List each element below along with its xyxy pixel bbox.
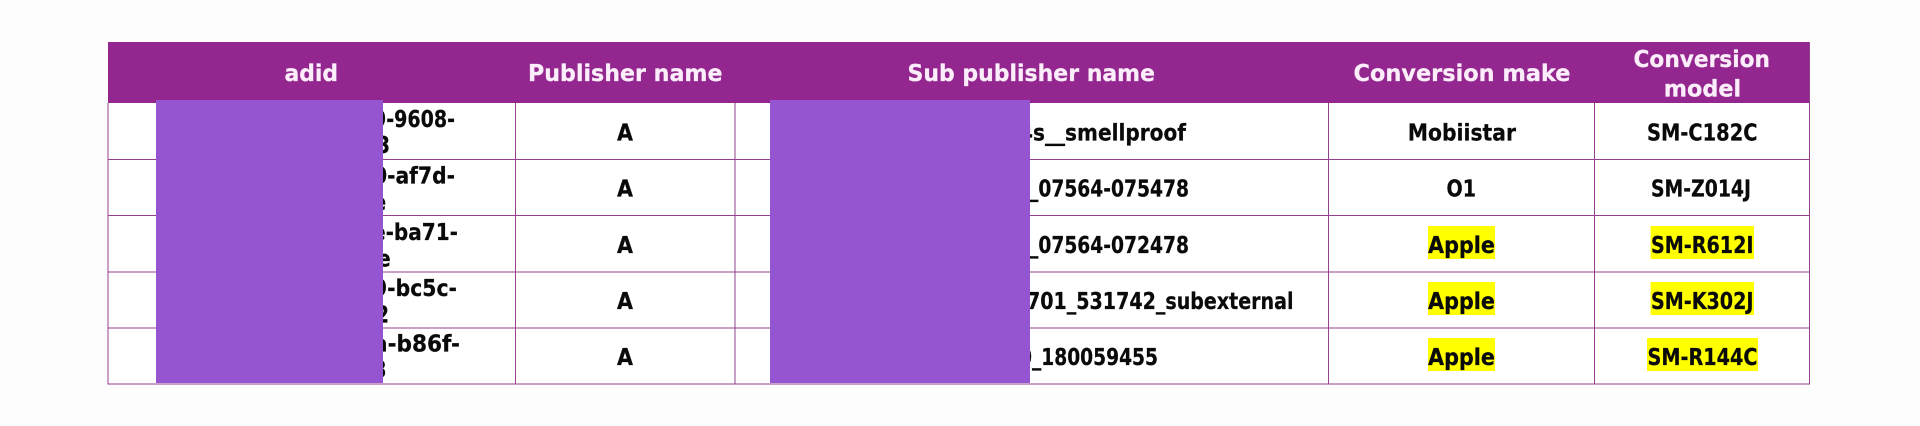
column: adid values: 0-af7d-: [373, 164, 455, 190]
column: Sub publisher name values: 4s__smellproof: [1019, 121, 1187, 147]
column: Conversion model values: SM-R144C: [1648, 345, 1758, 371]
column: Conversion make values: Mobiistar: [1408, 121, 1517, 147]
table header row: [108, 42, 1810, 103]
column: Publisher name values: A: [617, 233, 633, 259]
column: Conversion model values: SM-R612I: [1651, 233, 1754, 259]
column: Sub publisher name values: 701_531742_subexternal: [1027, 289, 1294, 315]
column: Conversion make values: Apple: [1428, 233, 1495, 259]
column: adid values: e-ba71-: [372, 220, 458, 246]
column: Conversion make values: Apple: [1428, 289, 1495, 315]
column: adid values: 3: [374, 358, 386, 384]
column: Sub publisher name values: _07564-072478: [1029, 233, 1189, 259]
column: Sub publisher name values: [1019, 121, 1294, 371]
column: adid values: 9-9608-: [373, 107, 455, 133]
column: Sub publisher name values: 0_180059455: [1019, 345, 1158, 371]
header: Sub publisher name: Sub publisher name: [908, 61, 1155, 87]
column: Conversion model values: SM-K302J: [1651, 289, 1754, 315]
redaction block: sub publisher name: [770, 100, 1030, 383]
column: Conversion model values: SM-Z014J: [1651, 177, 1751, 203]
column: Conversion make values: Apple: [1428, 345, 1495, 371]
header: Conversion model: model: [1664, 76, 1741, 102]
column: Conversion model values: [1647, 121, 1758, 371]
column: Publisher name values: A: [617, 289, 633, 315]
column: adid values: 2: [376, 303, 389, 329]
column: Publisher name values: A: [617, 177, 633, 203]
redaction block: adid: [156, 100, 383, 383]
column: Conversion make values: [1408, 121, 1517, 371]
column: Conversion make values: O1: [1446, 177, 1476, 203]
header: Conversion model: [1634, 47, 1770, 102]
column: adid values: 9-bc5c-: [373, 276, 457, 302]
column: Publisher name values: [617, 121, 633, 371]
column: adid values: e: [378, 247, 391, 273]
header: Conversion make: Conversion make: [1354, 61, 1570, 87]
yellow highlights: [1428, 226, 1758, 371]
header: Publisher name: Publisher name: [528, 61, 722, 87]
column: Sub publisher name values: _07564-075478: [1029, 177, 1189, 203]
column: adid values: a-b86f-: [373, 332, 460, 358]
column: Publisher name values: A: [617, 121, 633, 147]
column: adid values: 3: [377, 133, 390, 159]
column: adid values: [372, 107, 460, 384]
column: adid values: e: [374, 190, 386, 216]
header: adid: adid: [284, 61, 338, 87]
header: Conversion model: Conversion: [1634, 47, 1770, 73]
column: Publisher name values: A: [617, 345, 633, 371]
column: Conversion model values: SM-C182C: [1647, 121, 1758, 147]
